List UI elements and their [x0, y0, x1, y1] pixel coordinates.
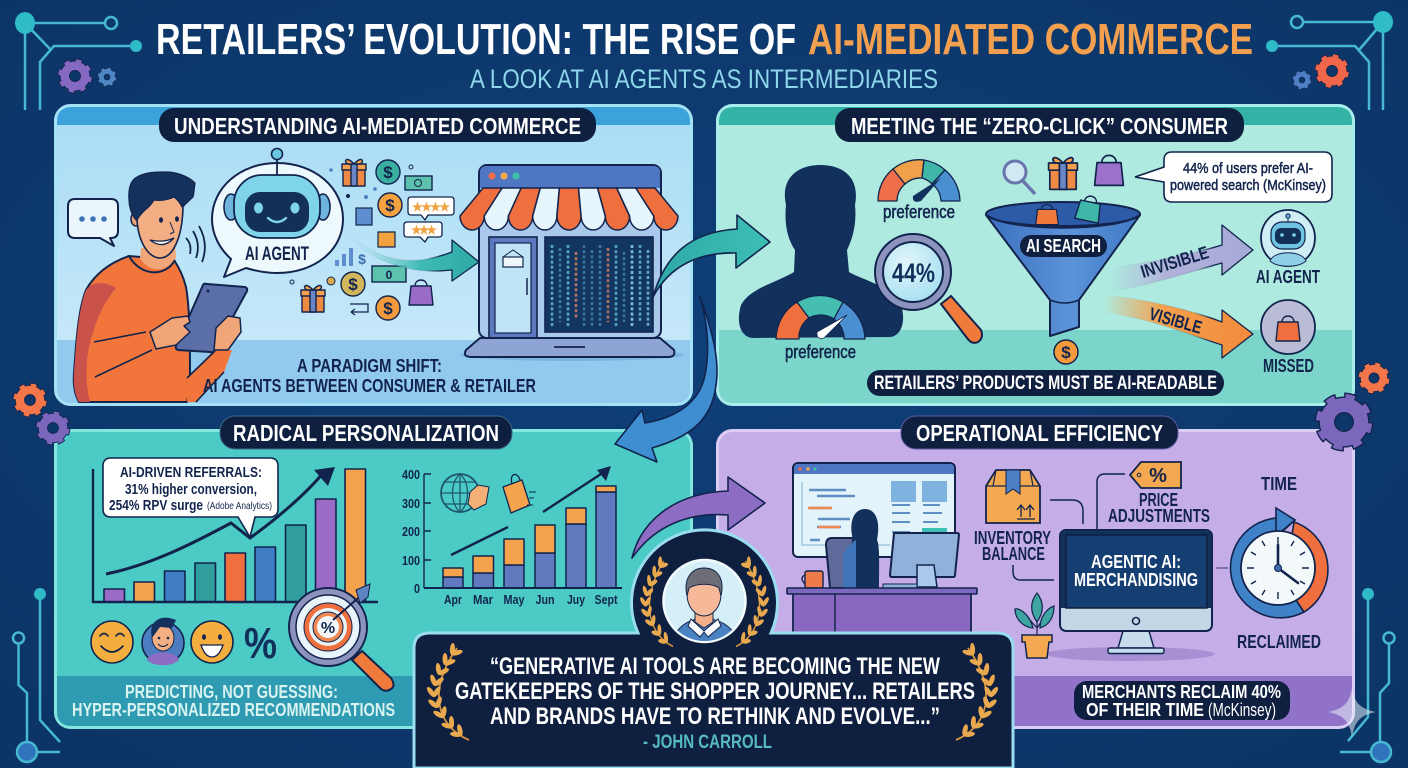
- caption: HYPER-PERSONALIZED RECOMMENDATIONS: [72, 700, 395, 720]
- stacked bar chart: months: 100: [402, 553, 420, 568]
- arrow: blue, zero-click to personalization: [615, 297, 717, 462]
- icon: happy face: [191, 621, 233, 663]
- awning: [460, 188, 678, 230]
- percent sign: %: [244, 619, 277, 668]
- panel: radical personalization: [56, 416, 692, 728]
- quote text: AND BRANDS HAVE TO RETHINK AND EVOLVE...”: [490, 703, 940, 730]
- stacked bar chart: months: Apr: [444, 592, 462, 607]
- door: [489, 237, 537, 338]
- callout: referrals stats: AI-DRIVEN REFERRALS:: [120, 464, 262, 481]
- label: price adjustments: ADJUSTMENTS: [1108, 506, 1210, 526]
- data icons: gifts, coins, cash and reviews: ★★★: [411, 223, 437, 237]
- callout: referrals stats: 254% RPV surge: [109, 497, 203, 514]
- laurel: quote right: [956, 643, 1000, 740]
- workspace illustration: [787, 463, 977, 633]
- icon: globe with hand and bag: [441, 474, 536, 513]
- callout: referrals stats: [103, 458, 278, 537]
- icon: missed circle: MISSED: [1263, 356, 1314, 376]
- laurel: avatar right: [736, 556, 770, 646]
- stacked bar chart: months: Mar: [473, 592, 493, 607]
- gauge: upper preference: [878, 160, 960, 222]
- heading pill: RADICAL PERSONALIZATION: [233, 420, 499, 446]
- icon: missed circle: [1261, 300, 1315, 376]
- laurel: quote left: [425, 643, 469, 740]
- emoji row: [91, 618, 277, 668]
- arrow: teal, understanding to zero-click: [653, 215, 770, 297]
- arrow: invisible: [1110, 225, 1253, 292]
- panel: meeting the zero-click consumer: [718, 106, 1354, 404]
- data icons: gifts, coins, cash and reviews: $: [385, 196, 395, 215]
- icon: sparkle watermark: [1328, 688, 1376, 738]
- caption: PREDICTING, NOT GUESSING:: [125, 682, 338, 702]
- icon: gears top right: [1294, 57, 1346, 88]
- icon: AI search funnel: AI SEARCH: [1026, 236, 1101, 256]
- stacked bar chart: months: Sept: [594, 592, 618, 607]
- circuit decoration: top left: [15, 12, 142, 110]
- heading pill: [220, 416, 512, 449]
- stacked bar chart: months: 0: [414, 581, 420, 596]
- icon: magnifier 44%: [875, 234, 982, 343]
- stacked bar chart: months: 400: [402, 467, 420, 482]
- icon: price tag: [1130, 462, 1181, 488]
- icon: AI agent circle: AI AGENT: [1256, 267, 1320, 287]
- data icons: gifts, coins, cash and reviews: [290, 160, 454, 320]
- title: RETAILERS’ EVOLUTION: THE RISE OF: [156, 15, 796, 64]
- caption: AI AGENTS BETWEEN CONSUMER & RETAILER: [203, 376, 536, 396]
- heading pill: [835, 108, 1244, 142]
- circuit decoration: bottom left: [13, 588, 60, 762]
- heading pill: [901, 416, 1178, 449]
- data icons: gifts, coins, cash and reviews: ★★★★: [412, 200, 450, 214]
- icon: AI search funnel: $: [1061, 343, 1071, 362]
- arrow: agent to store: [346, 232, 479, 281]
- stacked bar chart: months: Juy: [567, 592, 586, 607]
- icon: monitor agentic AI: [1045, 530, 1215, 661]
- gauge: lower preference: [776, 296, 865, 362]
- arrow: invisible: INVISIBLE: [1138, 242, 1211, 282]
- caption: A PARADIGM SHIFT:: [297, 356, 442, 376]
- icon: gears right: [1320, 365, 1387, 446]
- stacked bar chart: months: Jun: [536, 592, 555, 607]
- icon: price tag: %: [1149, 465, 1167, 487]
- heading pill: [159, 108, 596, 142]
- caption pill: RETAILERS’ PRODUCTS MUST BE AI-READABLE: [874, 373, 1217, 394]
- AI agent bubble with robot: AI AGENT: [245, 244, 309, 265]
- icon: magnifier 44%: 44%: [892, 258, 935, 288]
- caption: [72, 682, 395, 720]
- caption pill: OF THEIR TIME: [1086, 700, 1204, 720]
- gauge: upper preference: preference: [883, 202, 955, 222]
- icon: clock time reclaimed: TIME: [1261, 474, 1297, 494]
- icon: storefront laptop: [460, 165, 684, 361]
- arrow: purple, quote to efficiency: [632, 477, 765, 558]
- quote attribution: - JOHN CARROLL: [643, 732, 772, 753]
- label: inventory balance: [974, 528, 1051, 564]
- panel: operational efficiency: [718, 416, 1354, 728]
- data icons: gifts, coins, cash and reviews: $: [383, 299, 393, 318]
- heading pill: OPERATIONAL EFFICIENCY: [916, 420, 1163, 446]
- icon: target magnifier: [289, 584, 394, 691]
- stacked bar chart: months: 200: [402, 524, 420, 539]
- circuit decoration: top right: [1266, 11, 1393, 110]
- callout: 44% of users: [1135, 152, 1332, 202]
- label: price adjustments: PRICE: [1139, 490, 1178, 510]
- icon: target magnifier: %: [321, 620, 335, 637]
- stacked bar chart: months: May: [504, 592, 525, 607]
- title: AI-MEDIATED COMMERCE: [808, 15, 1253, 64]
- gauge: lower preference: preference: [785, 342, 856, 362]
- icon: AI search funnel: [986, 155, 1140, 364]
- stacked bar chart: months: [402, 466, 622, 607]
- subtitle: A LOOK AT AI AGENTS AS INTERMEDIARIES: [470, 64, 938, 94]
- icon: smile: [91, 621, 133, 663]
- icon: speaker avatar: [664, 560, 746, 650]
- arrow: visible: VISIBLE: [1147, 304, 1204, 338]
- label: inventory balance: BALANCE: [982, 544, 1045, 564]
- caption pill: (McKinsey): [1208, 700, 1276, 720]
- quote panel: [414, 530, 1013, 768]
- caption pill: [1074, 681, 1290, 720]
- icon: clock time reclaimed: [1216, 474, 1328, 652]
- callout: 44% of users: 44% of users prefer AI-: [1183, 160, 1313, 177]
- arrow: visible: [1104, 295, 1253, 358]
- label: inventory balance: INVENTORY: [974, 528, 1051, 548]
- icon: consumer with tablet: [74, 172, 247, 402]
- icon: gears left: [16, 386, 67, 442]
- icon: gears top left: [61, 62, 115, 90]
- icon: clock time reclaimed: RECLAIMED: [1237, 632, 1321, 652]
- heading pill: UNDERSTANDING AI-MEDIATED COMMERCE: [174, 113, 581, 139]
- caption pill: [867, 370, 1224, 396]
- icon: AI agent circle: [1256, 210, 1320, 287]
- icon: user avatar: [142, 618, 184, 665]
- quote text: GATEKEEPERS OF THE SHOPPER JOURNEY... RETAILERS: [455, 678, 975, 705]
- quote text: [455, 653, 975, 730]
- heading pill: MEETING THE “ZERO-CLICK” CONSUMER: [851, 113, 1228, 139]
- data icons: gifts, coins, cash and reviews: 0: [386, 268, 393, 282]
- AI agent bubble with robot: [212, 148, 343, 277]
- data icons: gifts, coins, cash and reviews: $: [383, 163, 393, 182]
- icon: consumer silhouette: [739, 165, 903, 338]
- icon: box: [986, 470, 1040, 523]
- icon: plant: [1015, 593, 1054, 658]
- icon: speech bubble: [68, 199, 118, 246]
- funnel icons above: [1004, 155, 1123, 194]
- bar chart: rising referrals: [93, 467, 378, 602]
- laurel: avatar left: [639, 556, 673, 646]
- connector lines: [1013, 474, 1125, 580]
- circuit decoration: bottom right: [1340, 588, 1394, 762]
- quote text: “GENERATIVE AI TOOLS ARE BECOMING THE NEW: [490, 653, 940, 680]
- code screen: [545, 237, 653, 332]
- caption: [203, 356, 536, 396]
- callout: 44% of users: powered search (McKinsey): [1170, 177, 1326, 194]
- label: price adjustments: [1108, 490, 1210, 526]
- panel: understanding AI-mediated commerce: [56, 106, 692, 404]
- stacked bar chart: months: 300: [402, 496, 420, 511]
- callout: referrals stats: 31% higher conversion,: [125, 481, 257, 498]
- data icons: gifts, coins, cash and reviews: $: [358, 251, 366, 267]
- data icons: gifts, coins, cash and reviews: $: [348, 275, 358, 294]
- icon: monitor agentic AI: MERCHANDISING: [1074, 570, 1198, 590]
- caption pill: MERCHANTS RECLAIM 40%: [1082, 682, 1281, 702]
- callout: referrals stats: (Adobe Analytics): [207, 501, 272, 512]
- icon: monitor agentic AI: AGENTIC AI:: [1091, 552, 1181, 572]
